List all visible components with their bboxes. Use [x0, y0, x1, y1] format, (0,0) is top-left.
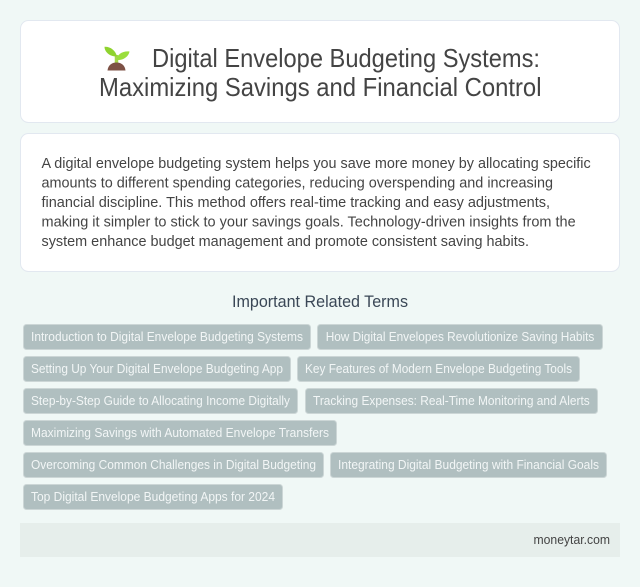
- tag: [330, 452, 606, 478]
- footer text: moneytar.com: [534, 532, 610, 547]
- tag: [298, 356, 580, 382]
- description text: amounts to different spending categories, reducing overspending and increasing: [42, 176, 553, 192]
- tag: [318, 324, 602, 350]
- panel: title card: [20, 20, 620, 122]
- tag: Key Features of Modern Envelope Budgeting Tools: [305, 362, 572, 376]
- tag: Step-by-Step Guide to Allocating Income Digitally: [31, 394, 291, 408]
- tag: Setting Up Your Digital Envelope Budgeting App: [31, 362, 283, 376]
- tag: [24, 356, 290, 382]
- description text: financial discipline. This method offers real-time tracking and easy adjustments,: [42, 195, 550, 211]
- tag: [24, 420, 336, 446]
- footer bar: [20, 523, 620, 557]
- tag: Integrating Digital Budgeting with Financial Goals: [338, 458, 599, 472]
- tag: Tracking Expenses: Real-Time Monitoring and Alerts: [313, 394, 590, 408]
- tag: Overcoming Common Challenges in Digital Budgeting: [31, 458, 316, 472]
- tag: How Digital Envelopes Revolutionize Saving Habits: [326, 330, 594, 344]
- title line 2: Maximizing Savings and Financial Control: [99, 74, 542, 102]
- tag: Top Digital Envelope Budgeting Apps for 2024: [31, 490, 275, 504]
- description text: A digital envelope budgeting system helps you save more money by allocating specific: [42, 156, 591, 172]
- tag: [24, 324, 310, 350]
- tag: Maximizing Savings with Automated Envelope Transfers: [31, 426, 329, 440]
- tag: [24, 388, 298, 414]
- tag: Introduction to Digital Envelope Budgeting Systems: [31, 330, 303, 344]
- heading: important related terms: Important Related Terms: [232, 293, 408, 311]
- icon: seedling: [104, 47, 130, 70]
- tag: [24, 484, 282, 510]
- tag: [306, 388, 598, 414]
- description text: system enhance budget management and promote consistent saving habits.: [42, 234, 529, 250]
- description text: [42, 156, 591, 250]
- tag list: [24, 324, 606, 510]
- title line 1: Digital Envelope Budgeting Systems:: [152, 45, 540, 73]
- panel: description card: [20, 134, 620, 272]
- tag: [24, 452, 324, 478]
- description text: making it simpler to stick to your savings goals. Technology-driven insights from the: [42, 214, 576, 230]
